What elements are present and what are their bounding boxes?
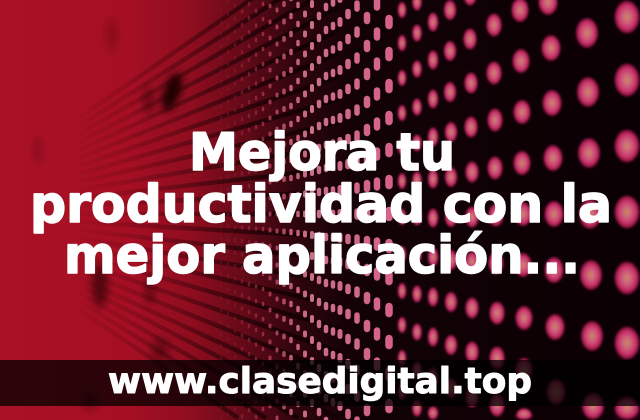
- title: mejor aplicación...: [64, 226, 580, 286]
- title: productividad con la: [30, 175, 612, 235]
- website url: www.clasedigital.top: [108, 361, 532, 402]
- large near LED dots: [398, 0, 640, 420]
- small far LED dot columns: [221, 0, 389, 420]
- dark smudges on the wall: [34, 19, 186, 410]
- bottom banner strip: [0, 360, 640, 406]
- dark converging row lines: [0, 0, 340, 418]
- title: Mejora tu: [189, 123, 455, 183]
- title: [30, 123, 612, 286]
